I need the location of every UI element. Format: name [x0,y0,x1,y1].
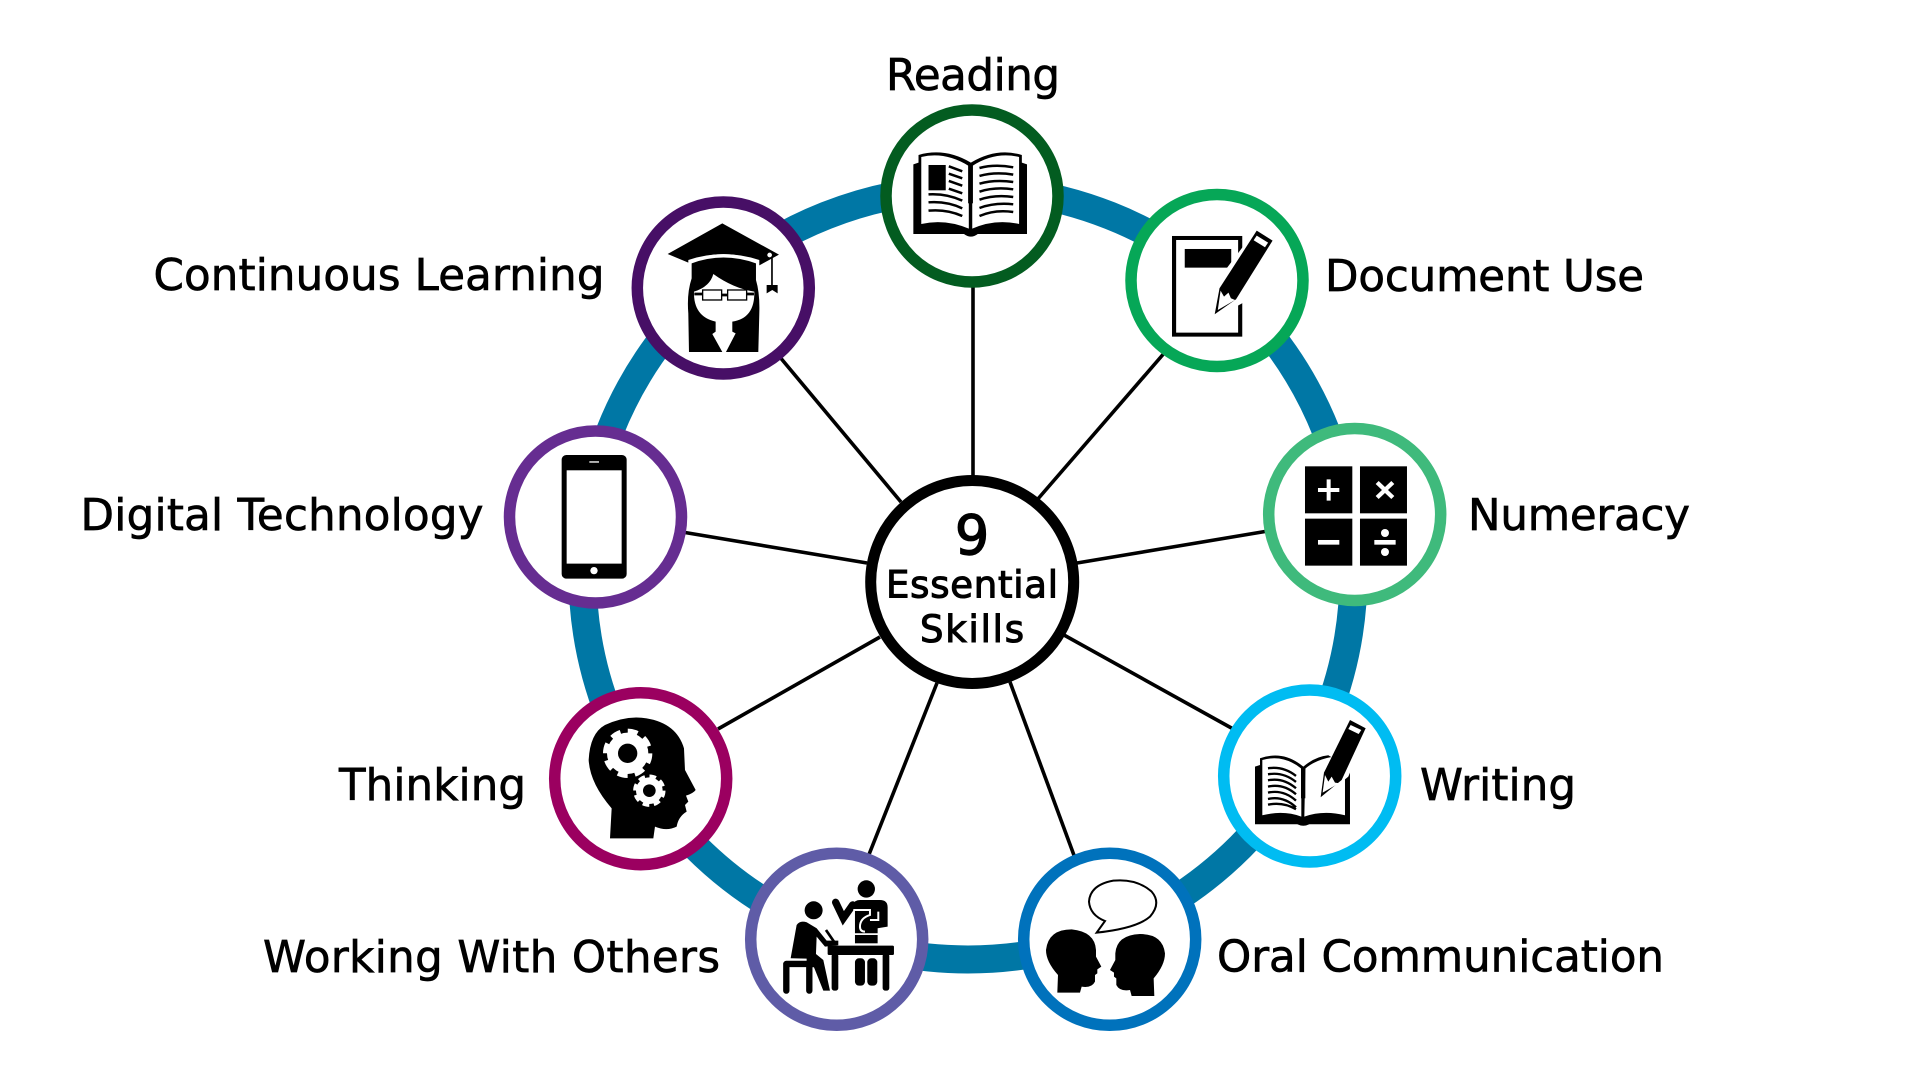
panel: Writing [1224,690,1396,862]
label: Writing: Writing [1420,761,1576,811]
label: Digital Technology: Digital Technology [80,491,484,541]
icon: smartphone [562,455,627,579]
ring: Document Use [1131,194,1303,366]
ring: Continuous Learning [637,202,809,374]
label: Thinking: Thinking [338,761,526,811]
icon: book and pencil [1255,717,1368,826]
panel: Working With Others [751,853,923,1025]
label: Document Use: Document Use [1325,252,1644,302]
panel: Numeracy [1269,428,1441,600]
icon: head with gears [589,717,696,838]
ring: Oral Communication [1024,853,1196,1025]
icon: document and pencil [1174,227,1278,335]
icon: graduate [668,223,779,352]
ring: Numeracy [1269,428,1441,600]
panel: Digital Technology [510,431,682,603]
outer ring [582,188,1354,960]
centre hub: 9 Essential Skills: 9 [955,504,989,567]
label: Oral Communication: Oral Communication [1217,932,1664,982]
ring: Reading [886,110,1058,282]
label: Numeracy: Numeracy [1468,491,1690,541]
label: Working With Others: Working With Others [263,933,720,983]
panel: Thinking [555,693,727,865]
panel: Oral Communication [1024,853,1196,1025]
ring: Working With Others [751,853,923,1025]
ring: Thinking [555,693,727,865]
icon: people at a table [786,880,894,991]
label: Continuous Learning: Continuous Learning [154,251,604,301]
centre hub: 9 Essential Skills [871,480,1074,684]
ring: Digital Technology [510,431,682,603]
icon: math operators [1305,466,1407,566]
icon: open book [913,152,1027,237]
spokes connecting centre to skills [682,285,1268,858]
panel: Document Use [1131,194,1303,366]
ring: Writing [1224,690,1396,862]
centre hub: 9 Essential Skills: Skills [920,608,1024,651]
centre hub: 9 Essential Skills: Essential [886,564,1058,606]
label: Reading: Reading [886,51,1060,101]
icon: two heads talking [1046,880,1165,996]
panel: Continuous Learning [637,202,809,374]
panel: Reading [886,110,1058,282]
